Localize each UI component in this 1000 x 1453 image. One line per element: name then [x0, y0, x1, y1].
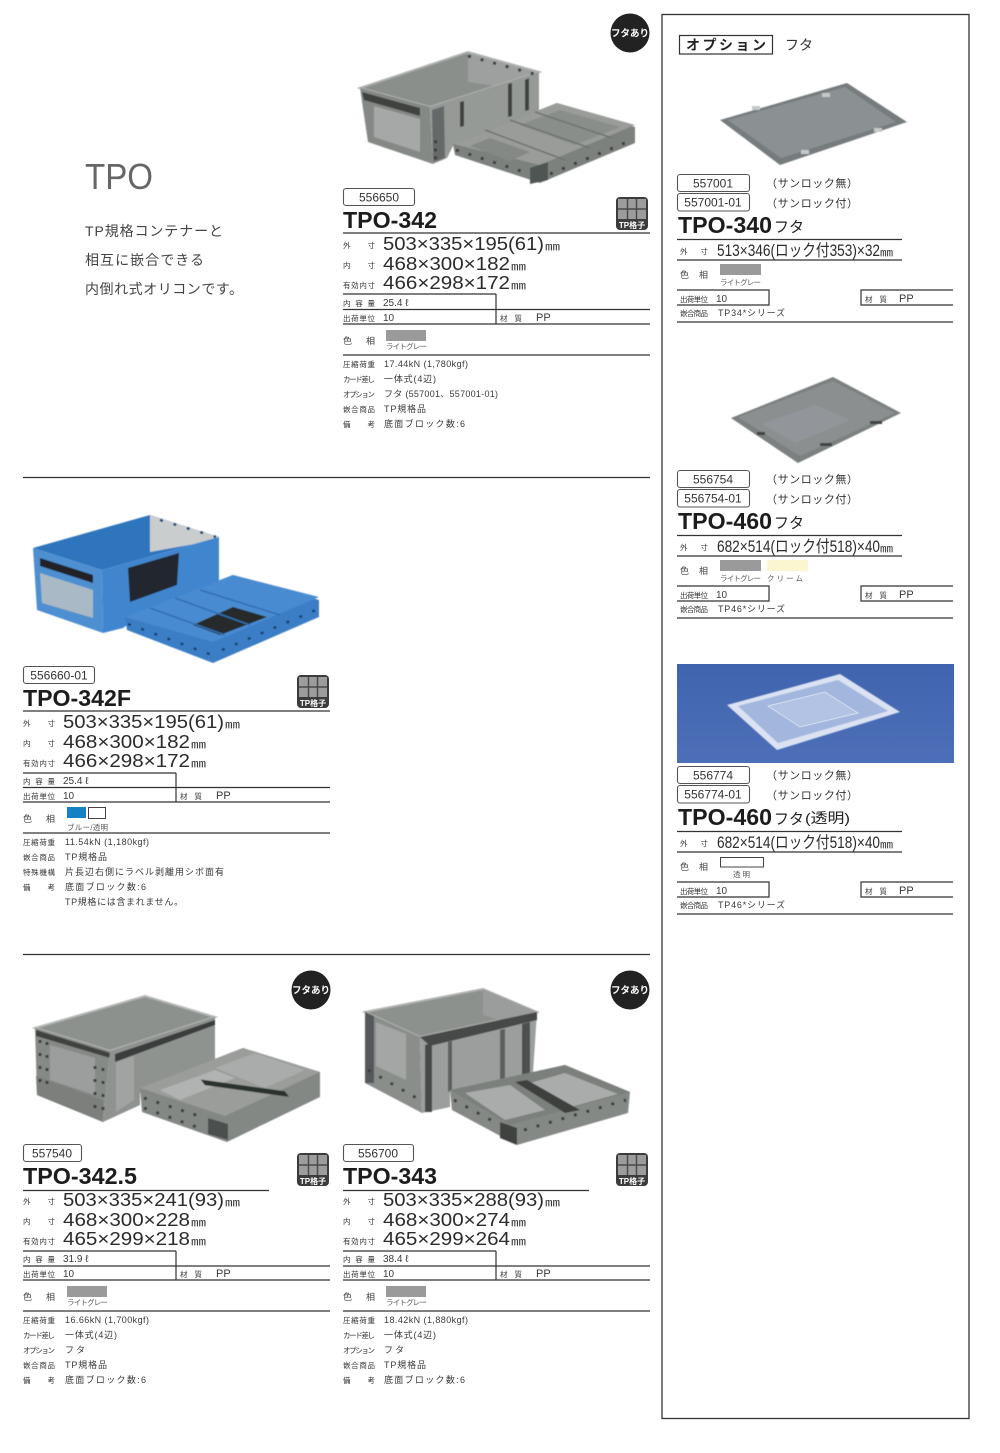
- spec table: 25.4 ℓ: [383, 298, 409, 309]
- product codes: 556754: [693, 472, 733, 486]
- spec table: PP: [536, 1268, 551, 1280]
- spec table: 外 寸: [680, 246, 708, 256]
- spec table: 底面ブロック数:6: [65, 1374, 146, 1385]
- spec table: ライトグレー: [720, 277, 761, 287]
- spec table: 16.66kN (1,700kgf): [65, 1315, 149, 1325]
- spec table: カード差し: [343, 374, 375, 384]
- spec table: 圧縮荷重: [23, 1315, 56, 1325]
- spec table: 内容量: [23, 1254, 56, 1264]
- photo: gray container TPO-342.5: [35, 996, 320, 1142]
- spec table: オプション: [23, 1346, 55, 1355]
- product: TPO-343: [343, 970, 650, 1385]
- photo: gray container TPO-342: [360, 52, 635, 184]
- spec table: 出荷単位: [343, 313, 376, 323]
- spec table: ライトグレー: [67, 1297, 108, 1307]
- icon: TP grid: [297, 1153, 329, 1186]
- spec table: 31.9 ℓ: [63, 1254, 89, 1265]
- spec table: 468×300×274: [383, 1210, 510, 1230]
- spec table: 色 相: [680, 565, 708, 576]
- spec table: [343, 233, 650, 429]
- series description: TP規格コンテナーと: [85, 223, 223, 239]
- product code: [24, 666, 94, 684]
- spec table: ㎜: [880, 543, 893, 555]
- spec table: 内容量: [23, 776, 56, 786]
- spec table: ㎜: [191, 1217, 206, 1229]
- spec table: 色 相: [680, 861, 708, 872]
- series description: 内倒れ式オリコンです。: [85, 281, 243, 297]
- spec table: ㎜: [511, 1217, 526, 1229]
- spec table: 503×335×195(61): [63, 712, 224, 732]
- icon: TP grid: [616, 1153, 648, 1186]
- product codes: 556774: [693, 768, 733, 782]
- product codes: （サンロック付）: [766, 197, 858, 210]
- spec table: 有効内寸: [343, 280, 376, 290]
- icon: TP grid: TP格子: [619, 220, 645, 230]
- product: TPO-342.5: [23, 970, 330, 1385]
- spec table: 内 寸: [23, 738, 56, 748]
- product codes: [678, 470, 858, 507]
- spec table: 10: [383, 313, 395, 324]
- spec table: 503×335×195(61): [383, 234, 544, 254]
- option heading: オプション: [686, 37, 766, 53]
- spec table: 出荷単位: [343, 1269, 376, 1279]
- spec table: 17.44kN (1,780kgf): [384, 359, 468, 369]
- spec table: 一体式(4辺): [65, 1329, 117, 1340]
- icon: TP grid: [616, 197, 648, 230]
- spec table: 503×335×288(93): [383, 1190, 544, 1210]
- spec table: TP46*シリーズ: [718, 899, 785, 910]
- spec table: 底面ブロック数:6: [384, 1374, 465, 1385]
- spec table: 嵌合商品: [343, 404, 375, 414]
- spec table: PP: [216, 790, 231, 802]
- spec table: TP規格品: [384, 403, 426, 414]
- badge: lid available: フタあり: [292, 984, 330, 996]
- spec table: ㎜: [191, 1236, 206, 1248]
- spec table: [23, 1190, 330, 1385]
- spec table: 25.4 ℓ: [63, 776, 89, 787]
- product codes: [678, 174, 858, 211]
- spec table: [677, 240, 953, 322]
- product code: 556650: [359, 190, 399, 204]
- product: TPO-342F: [23, 515, 330, 907]
- option: TPO-340 lid: [677, 83, 953, 322]
- model name: TPO-342: [343, 207, 437, 233]
- spec table: ㎜: [225, 1197, 240, 1209]
- spec table: 備 考: [23, 1375, 55, 1385]
- spec table: 材 質: [865, 886, 888, 896]
- product codes: （サンロック無）: [766, 176, 858, 190]
- spec table: TP46*シリーズ: [718, 603, 785, 614]
- product codes: [678, 766, 858, 803]
- spec table: 10: [716, 590, 728, 601]
- spec table: 材 質: [865, 590, 888, 600]
- spec table: 外 寸: [343, 240, 376, 250]
- spec table: 外 寸: [23, 1196, 56, 1206]
- spec table: TP規格には含まれません。: [65, 896, 183, 907]
- spec table: ㎜: [225, 719, 240, 731]
- model name: フタ: [774, 811, 804, 828]
- spec table: 内 寸: [23, 1216, 56, 1226]
- photo: gray container TPO-343: [365, 989, 630, 1145]
- spec table: 出荷単位: [23, 791, 56, 801]
- product codes: 557001-01: [684, 196, 742, 210]
- spec table: ㎜: [545, 241, 560, 253]
- spec table: 外 寸: [23, 718, 56, 728]
- spec table: 11.54kN (1,180kgf): [65, 837, 149, 847]
- spec table: TP規格品: [65, 1359, 107, 1370]
- spec table: ㎜: [880, 839, 893, 851]
- spec table: フタ: [384, 1345, 404, 1355]
- spec table: フタ (557001、557001-01): [384, 389, 498, 399]
- spec table: PP: [899, 589, 914, 601]
- product codes: （サンロック付）: [766, 789, 858, 802]
- spec table: 出荷単位: [23, 1269, 56, 1279]
- spec table: 備 考: [343, 1375, 375, 1385]
- spec table: PP: [536, 312, 551, 324]
- spec table: クリーム: [767, 574, 803, 583]
- spec table: オプション: [343, 390, 375, 399]
- spec table: ブルー/透明: [67, 822, 108, 832]
- spec table: [677, 536, 953, 618]
- spec table: ㎜: [191, 739, 206, 751]
- option heading: [680, 36, 813, 54]
- model name: TPO-340: [678, 212, 772, 238]
- spec table: 有効内寸: [23, 1236, 56, 1246]
- option: TPO-460 clear lid: [677, 664, 954, 914]
- product code: 557540: [32, 1146, 72, 1160]
- model name: フタ: [774, 515, 804, 532]
- spec table: 透明: [733, 870, 750, 879]
- icon: TP grid: [297, 675, 329, 708]
- spec table: 513×346(ロック付353)×32: [717, 241, 880, 260]
- spec table: 10: [63, 1269, 75, 1280]
- spec table: 38.4 ℓ: [383, 1254, 409, 1265]
- spec table: 嵌合商品: [343, 1360, 375, 1370]
- product code: [344, 188, 414, 206]
- product codes: 557001: [693, 176, 733, 190]
- spec table: 18.42kN (1,880kgf): [384, 1315, 468, 1325]
- model name: TPO-342.5: [23, 1163, 137, 1189]
- spec table: カード差し: [23, 1330, 55, 1340]
- spec table: オプション: [343, 1346, 375, 1355]
- product code: [24, 1144, 82, 1162]
- spec table: 底面ブロック数:6: [65, 881, 146, 892]
- photo: gray lid: [720, 83, 907, 165]
- model name: TPO-460: [678, 508, 772, 534]
- spec table: 片長辺右側にラベル剥離用シボ面有: [65, 866, 224, 877]
- spec table: 色 相: [680, 269, 708, 280]
- product codes: （サンロック無）: [766, 768, 858, 782]
- spec table: 10: [716, 886, 728, 897]
- spec table: TP規格品: [384, 1359, 426, 1370]
- spec table: [677, 832, 953, 914]
- spec table: 465×299×264: [383, 1229, 510, 1249]
- photo: clear lid on blue background: [677, 664, 954, 763]
- spec table: 底面ブロック数:6: [384, 418, 465, 429]
- series description: [85, 223, 243, 297]
- spec table: 嵌合商品: [23, 1360, 55, 1370]
- spec table: 特殊機構: [23, 867, 56, 877]
- spec table: 色 相: [343, 335, 375, 346]
- spec table: PP: [216, 1268, 231, 1280]
- model name: TPO-342F: [23, 685, 131, 711]
- spec table: 468×300×228: [63, 1210, 190, 1230]
- spec table: 材 質: [865, 294, 888, 304]
- spec table: 圧縮荷重: [343, 1315, 376, 1325]
- spec table: PP: [899, 885, 914, 897]
- icon: TP grid: TP格子: [619, 1176, 645, 1186]
- product: TPO-342: [343, 14, 650, 429]
- spec table: 一体式(4辺): [384, 1329, 436, 1340]
- spec table: 内容量: [343, 1254, 376, 1264]
- spec table: 682×514(ロック付518)×40: [717, 537, 880, 556]
- spec table: 10: [383, 1269, 395, 1280]
- spec table: [343, 1190, 650, 1385]
- spec table: ㎜: [511, 261, 526, 273]
- spec table: 嵌合商品: [680, 900, 708, 910]
- series title: TPO: [85, 156, 153, 197]
- spec table: ㎜: [545, 1197, 560, 1209]
- spec table: 材 質: [500, 313, 522, 323]
- spec table: 出荷単位: [680, 886, 708, 896]
- option: TPO-460 lid: [677, 377, 953, 618]
- spec table: 466×298×172: [383, 273, 510, 293]
- spec table: 有効内寸: [23, 758, 56, 768]
- product code: [344, 1144, 414, 1162]
- photo: blue container TPO-342F: [33, 515, 319, 663]
- icon: TP grid: TP格子: [300, 1176, 326, 1186]
- badge: lid available: フタあり: [611, 984, 649, 996]
- spec table: 468×300×182: [63, 732, 190, 752]
- spec table: 465×299×218: [63, 1229, 190, 1249]
- spec table: 10: [63, 791, 75, 802]
- badge: lid available: [610, 970, 650, 1010]
- spec table: 出荷単位: [680, 294, 708, 304]
- product code: 556700: [358, 1146, 398, 1160]
- spec table: TP規格品: [65, 851, 107, 862]
- spec table: 468×300×182: [383, 254, 510, 274]
- product codes: （サンロック付）: [766, 493, 858, 506]
- spec table: 外 寸: [680, 542, 708, 552]
- spec table: 嵌合商品: [680, 604, 708, 614]
- spec table: 682×514(ロック付518)×40: [717, 833, 880, 852]
- spec table: 内 寸: [343, 260, 376, 270]
- spec table: TP34*シリーズ: [718, 307, 785, 318]
- series description: 相互に嵌合できる: [85, 252, 204, 268]
- product code: 556660-01: [30, 668, 88, 682]
- photo: gray lid: [731, 377, 901, 463]
- spec table: ライトグレー: [386, 341, 427, 351]
- option heading: フタ: [785, 37, 813, 53]
- spec table: 圧縮荷重: [23, 837, 56, 847]
- model name: [678, 804, 850, 830]
- badge: lid available: [292, 970, 330, 1010]
- spec table: フタ: [65, 1345, 85, 1355]
- spec table: 材 質: [500, 1269, 522, 1279]
- spec table: 有効内寸: [343, 1236, 376, 1246]
- spec table: 外 寸: [343, 1196, 376, 1206]
- spec table: 内容量: [343, 298, 376, 308]
- spec table: 503×335×241(93): [63, 1190, 224, 1210]
- spec table: [23, 711, 330, 907]
- spec table: 出荷単位: [680, 590, 708, 600]
- spec table: 内 寸: [343, 1216, 376, 1226]
- spec table: ㎜: [511, 1236, 526, 1248]
- spec table: 材 質: [180, 1269, 202, 1279]
- spec table: カード差し: [343, 1330, 375, 1340]
- spec table: ライトグレー: [386, 1297, 427, 1307]
- product codes: 556754-01: [684, 492, 742, 506]
- spec table: PP: [899, 293, 914, 305]
- panel: options: [662, 14, 969, 1418]
- spec table: ㎜: [511, 280, 526, 292]
- spec table: 10: [716, 294, 728, 305]
- spec table: 色 相: [23, 813, 55, 824]
- spec table: 備 考: [23, 882, 55, 892]
- spec table: ㎜: [191, 758, 206, 770]
- model name: TPO-343: [343, 1163, 437, 1189]
- spec table: 466×298×172: [63, 751, 190, 771]
- product codes: 556774-01: [684, 788, 742, 802]
- badge: lid available: フタあり: [611, 28, 649, 40]
- spec table: 備 考: [343, 419, 375, 429]
- spec table: 色 相: [343, 1291, 375, 1302]
- spec table: 嵌合商品: [23, 852, 55, 862]
- model name: フタ: [774, 219, 804, 236]
- spec table: ライトグレー: [720, 573, 761, 583]
- spec table: 一体式(4辺): [384, 373, 436, 384]
- model name: TPO-460: [678, 804, 772, 830]
- spec table: ㎜: [880, 247, 893, 259]
- badge: lid available: [610, 14, 650, 52]
- product codes: （サンロック無）: [766, 472, 858, 486]
- spec table: 色 相: [23, 1291, 55, 1302]
- spec table: 圧縮荷重: [343, 359, 376, 369]
- model name: (透明): [805, 810, 850, 826]
- icon: TP grid: TP格子: [300, 698, 326, 708]
- spec table: 嵌合商品: [680, 308, 708, 318]
- spec table: 外 寸: [680, 838, 708, 848]
- spec table: 材 質: [180, 791, 202, 801]
